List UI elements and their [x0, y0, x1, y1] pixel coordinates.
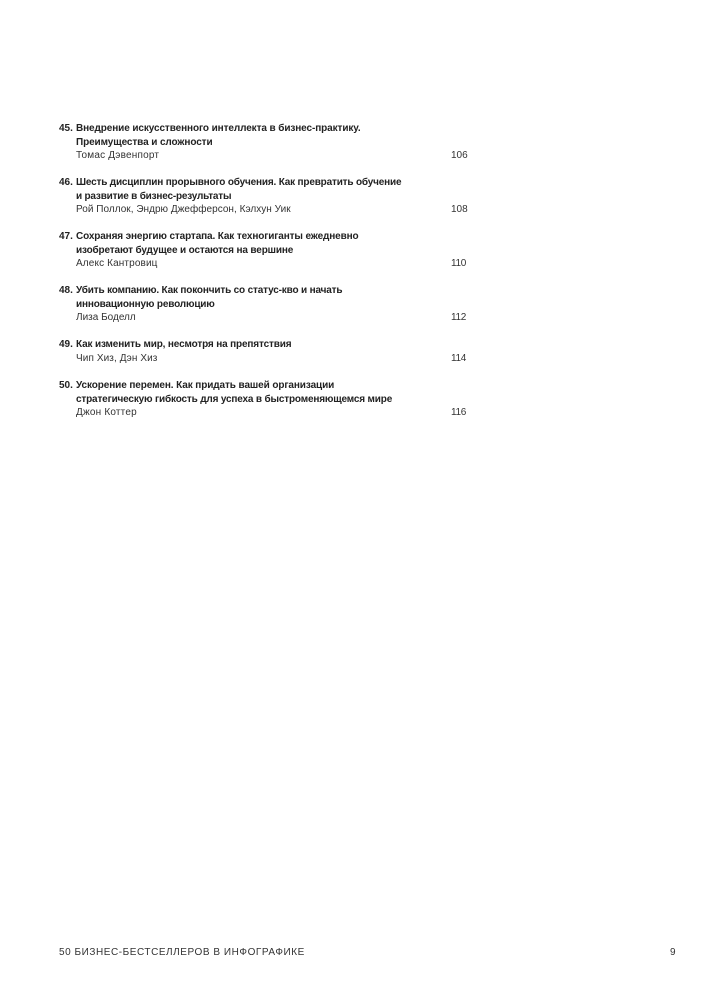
entry 48: 112 — [451, 312, 466, 323]
entry 49: 49. — [59, 339, 73, 350]
footer page number: 9 — [670, 947, 676, 958]
entry 49 — [59, 339, 466, 364]
entry 46: и развитие в бизнес-результаты — [76, 191, 231, 202]
entry 50: 116 — [451, 407, 466, 418]
entry 45 — [59, 123, 468, 161]
entry 46: Рой Поллок, Эндрю Джефферсон, Кэлхун Уик — [76, 204, 291, 215]
entry 45: 45. — [59, 123, 73, 134]
entry 47: Сохраняя энергию стартапа. Как техногиганты ежедневно — [76, 231, 358, 242]
table of contents list — [59, 123, 468, 418]
entry 48: 48. — [59, 285, 73, 296]
entry 45: Томас Дэвенпорт — [76, 150, 159, 161]
entry 48 — [59, 285, 466, 323]
footer book title: 50 БИЗНЕС-БЕСТСЕЛЛЕРОВ В ИНФОГРАФИКЕ — [59, 947, 305, 958]
entry 46: 46. — [59, 177, 73, 188]
entry 50: Джон Коттер — [76, 407, 137, 418]
entry 50: 50. — [59, 380, 73, 391]
entry 45: Преимущества и сложности — [76, 137, 213, 148]
entry 47: 47. — [59, 231, 73, 242]
entry 45: 106 — [451, 150, 468, 161]
entry 47 — [59, 231, 466, 269]
entry 50 — [59, 380, 466, 418]
entry 48: Лиза Боделл — [76, 312, 136, 323]
entry 48: инновационную революцию — [76, 299, 215, 310]
entry 49: Чип Хиз, Дэн Хиз — [76, 353, 157, 364]
entry 46 — [59, 177, 468, 215]
entry 46: 108 — [451, 204, 468, 215]
entry 47: Алекс Кантровиц — [76, 258, 158, 269]
entry 49: Как изменить мир, несмотря на препятствия — [76, 339, 291, 350]
entry 46: Шесть дисциплин прорывного обучения. Как превратить обучение — [76, 177, 401, 188]
entry 45: Внедрение искусственного интеллекта в бизнес-практику. — [76, 123, 361, 134]
entry 49: 114 — [451, 353, 466, 364]
entry 50: Ускорение перемен. Как придать вашей организации — [76, 380, 334, 391]
entry 48: Убить компанию. Как покончить со статус-кво и начать — [76, 285, 342, 296]
entry 47: 110 — [451, 258, 466, 269]
entry 50: стратегическую гибкость для успеха в быстроменяющемся мире — [76, 394, 392, 405]
entry 47: изобретают будущее и остаются на вершине — [76, 245, 293, 256]
